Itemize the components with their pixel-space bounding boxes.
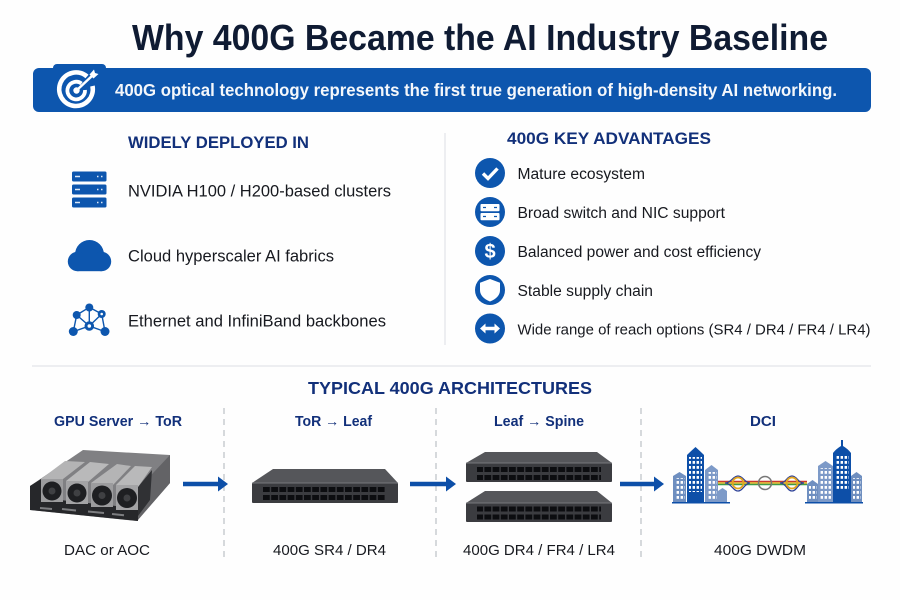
item text: Stable supply chain [518,283,653,300]
icon: network [69,304,110,336]
banner text: 400G optical technology represents the first true generation of high-density AI networking. [115,80,837,100]
illustration: data center interconnect [672,440,863,504]
icon: target [59,70,98,106]
column label: DCI [750,414,776,430]
item text: Ethernet and InfiniBand backbones [128,312,386,330]
item text: Broad switch and NIC support [518,205,726,222]
heading: WIDELY DEPLOYED IN [128,133,309,152]
title: Why 400G Became the AI Industry Baseline [132,17,828,58]
item text: Balanced power and cost efficiency [518,244,761,261]
icon: cloud [68,240,111,271]
column caption: 400G SR4 / DR4 [273,543,386,559]
icon: server rack [72,172,106,208]
icon: double arrow [475,314,505,344]
item text: Mature ecosystem [518,166,645,183]
column label: Leaf → Spine [494,414,584,430]
column label: GPU Server → ToR [54,414,183,430]
column caption: 400G DR4 / FR4 / LR4 [463,543,615,559]
illustration: spine switch [466,491,612,522]
right skyline [805,440,863,504]
panel: typical 400G architectures [30,378,863,562]
panel: widely deployed in [68,133,391,336]
fiber link [718,476,807,491]
panel: 400G key advantages [475,129,870,344]
item text: NVIDIA H100 / H200-based clusters [128,182,391,200]
icon: dollar [475,236,505,266]
left skyline [672,447,730,504]
heading: 400G KEY ADVANTAGES [507,129,711,148]
icon: shield [475,275,505,305]
arrow [620,476,664,492]
illustration: GPU server [30,450,170,521]
icon: switch [475,197,505,227]
arrow [183,476,228,492]
arrow [410,476,456,492]
column caption: DAC or AOC [64,543,150,559]
icon: check [475,158,505,188]
column caption: 400G DWDM [714,543,806,559]
item text: Cloud hyperscaler AI fabrics [128,248,334,266]
column label: ToR → Leaf [295,414,372,430]
illustration: ToR switch [252,469,398,503]
item text: Wide range of reach options (SR4 / DR4 / FR4 / LR4) [518,322,870,338]
section heading: TYPICAL 400G ARCHITECTURES [308,378,592,398]
illustration: leaf switch [466,452,612,482]
icon: dollar: $ [484,241,496,263]
banner [33,64,871,112]
